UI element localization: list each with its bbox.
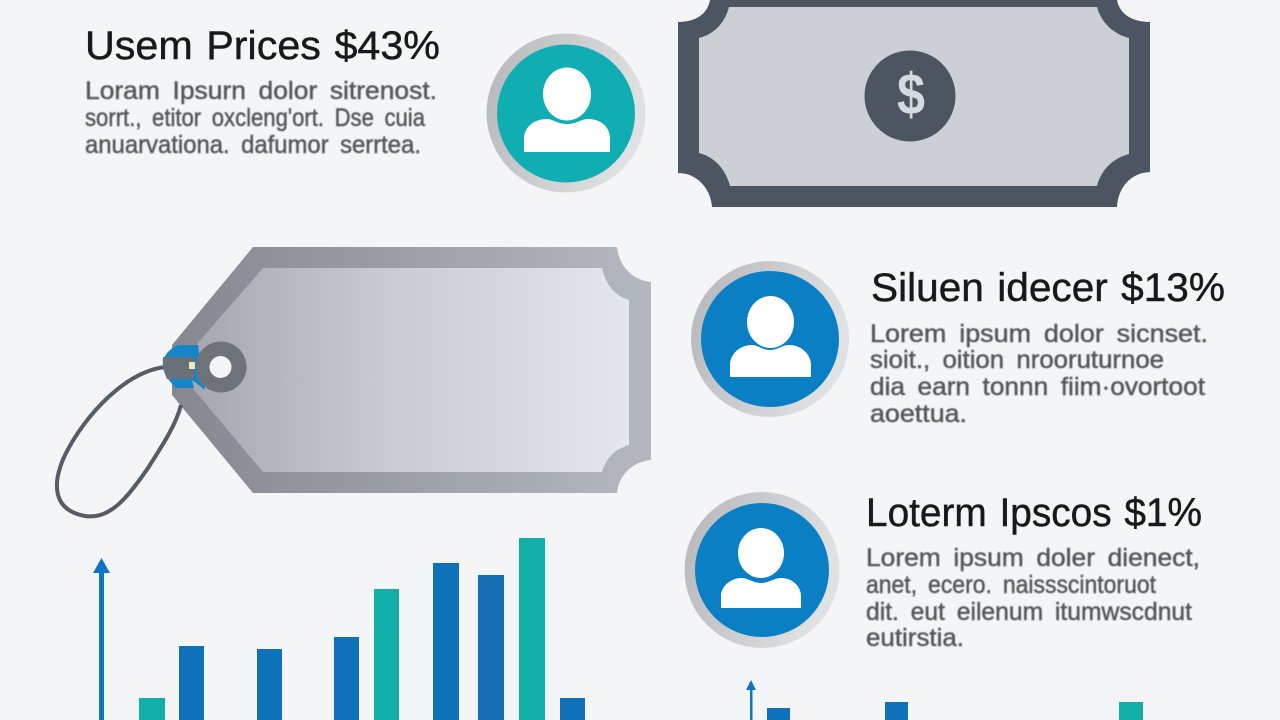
body text: top left: Loram Ipsurn dolor sitrenost. [85, 77, 437, 105]
heading: Siluen: Siluen idecer $13% [871, 266, 1225, 310]
body text: middle right: aoettua. [870, 400, 967, 428]
arrow: right chart axis [746, 680, 756, 720]
icon: teal person badge [486, 34, 646, 192]
icon: blue person badge lower [684, 492, 840, 648]
icon: tag string loop [57, 367, 181, 516]
body text: top left [85, 77, 437, 159]
heading: Loterm Ipscos: Loterm Ipscos $1% [866, 491, 1202, 535]
icon: dollar coin: $ [897, 62, 925, 127]
bar chart: left [93, 538, 585, 720]
arrow: left chart axis [93, 558, 110, 720]
body text: lower right: Lorem ipsum doler dienect, [866, 544, 1200, 572]
body text: lower right: anet, ecero. naissscintoruot [866, 571, 1156, 599]
section: top left text block [85, 24, 440, 159]
section: lower right text block [684, 491, 1202, 652]
price ticket with dollar coin [678, 0, 1150, 207]
price tag [57, 247, 651, 516]
body text: top left: sorrt., etitor oxcleng'ort. Dse cuia [85, 104, 425, 132]
body text: lower right: dit. eut eilenum itumwscdnut [866, 598, 1192, 626]
body text: middle right: sioit., oition nrooruturnoe [870, 346, 1164, 374]
body text: middle right [870, 320, 1208, 428]
icon: tag eyelet [163, 342, 246, 392]
body text: middle right: Lorem ipsum dolor sicnset. [870, 320, 1208, 348]
body text: middle right: dia earn tonnn fiim·ovortoot [870, 373, 1205, 401]
icon: blue person badge [691, 261, 849, 417]
heading: Usem Prices: Usem Prices $43% [85, 24, 440, 68]
body text: lower right: eutirstia. [866, 624, 964, 652]
bar chart: right [746, 680, 1143, 720]
body text: top left: anuarvationa. dafumor serrtea. [85, 131, 421, 159]
icon: dollar coin [864, 50, 956, 142]
body text: lower right [866, 544, 1200, 652]
section: middle right text block [691, 261, 1225, 428]
